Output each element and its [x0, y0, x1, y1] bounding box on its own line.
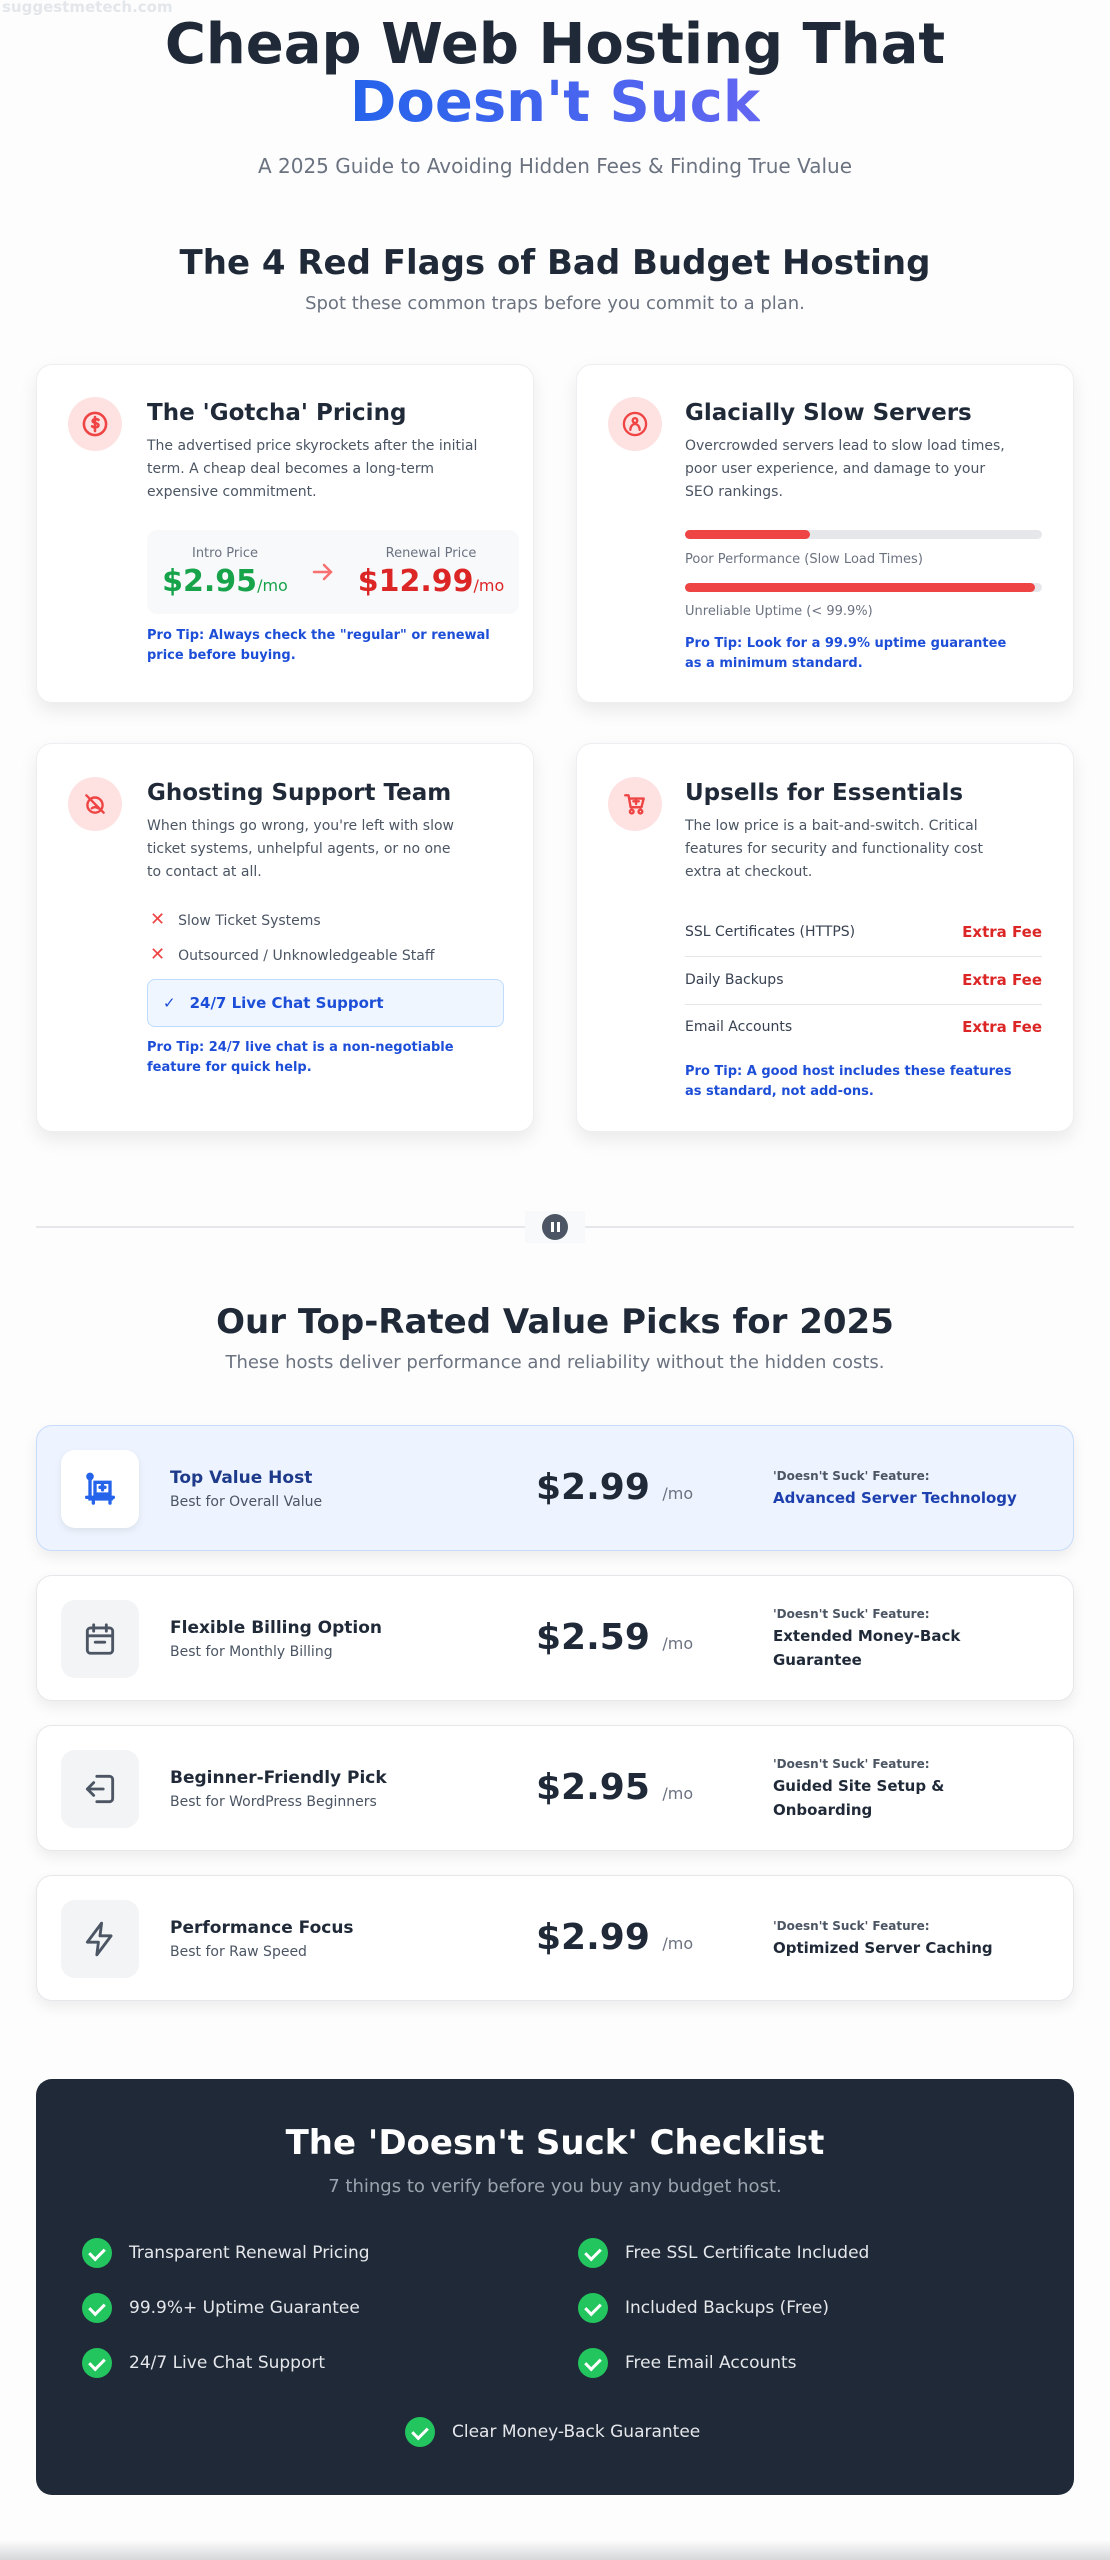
- fee row: ssl: Extra Fee: [962, 923, 1042, 941]
- card text: ticket systems, unhelpful agents, or no one: [147, 841, 451, 857]
- item: Free SSL Certificate Included: [625, 2243, 869, 2263]
- intro price: [162, 546, 288, 599]
- card title: The 'Gotcha' Pricing: [147, 400, 406, 426]
- pick subtitle: Best for WordPress Beginners: [170, 1794, 377, 1810]
- feature: [773, 1919, 993, 1957]
- pro tip: as standard, not add-ons.: [685, 1084, 874, 1099]
- item: [578, 2293, 829, 2323]
- item: [82, 2348, 325, 2378]
- card text: features for security and functionality cost: [685, 841, 983, 857]
- intro price: Intro Price: [192, 546, 258, 561]
- card title: Ghosting Support Team: [147, 780, 451, 806]
- card text: When things go wrong, you're left with slow: [147, 818, 454, 834]
- pick: beginner friendly: [36, 1725, 1074, 1851]
- icon: dollar: [68, 397, 122, 451]
- feature: Guarantee: [773, 1651, 862, 1669]
- card text: Overcrowded servers lead to slow load times,: [685, 438, 1005, 454]
- icon: support off: [68, 777, 122, 831]
- panel: gotcha pricing: [36, 364, 534, 703]
- arrow: [312, 564, 333, 580]
- checklist subtitle: 7 things to verify before you buy any budget host.: [328, 2176, 782, 2197]
- feature: Guided Site Setup &: [773, 1777, 944, 1795]
- panel: ghosting support: [36, 743, 534, 1132]
- feature: 'Doesn't Suck' Feature:: [773, 1919, 930, 1933]
- feature: 'Doesn't Suck' Feature:: [773, 1469, 930, 1483]
- pro tip: as a minimum standard.: [685, 656, 863, 671]
- card title: Upsells for Essentials: [685, 780, 963, 806]
- good item box: [147, 979, 504, 1027]
- good item box: ✓ 24/7 Live Chat Support: [163, 994, 384, 1012]
- card text: SEO rankings.: [685, 484, 783, 500]
- feature: Extended Money-Back: [773, 1627, 960, 1645]
- feature: 'Doesn't Suck' Feature:: [773, 1757, 930, 1771]
- heading: red flags: The 4 Red Flags of Bad Budget Hosting: [180, 243, 930, 283]
- panel: checklist: [36, 2079, 1074, 2495]
- price: $2.99 /mo: [536, 1917, 693, 1958]
- card text: [684, 818, 983, 880]
- item: Clear Money-Back Guarantee: [452, 2422, 700, 2442]
- pick name: Flexible Billing Option: [170, 1618, 382, 1638]
- pro tip: feature for quick help.: [147, 1060, 312, 1075]
- title: Cheap Web Hosting That: [165, 12, 945, 77]
- item: [82, 2238, 370, 2268]
- feature: 'Doesn't Suck' Feature:: [773, 1607, 930, 1621]
- checklist title: The 'Doesn't Suck' Checklist: [286, 2123, 824, 2163]
- item: Transparent Renewal Pricing: [129, 2243, 370, 2263]
- pro tip: price before buying.: [147, 648, 296, 663]
- bar: performance: [685, 530, 1042, 539]
- renewal price: [358, 546, 504, 599]
- card text: [147, 818, 454, 880]
- pick: top value host: [36, 1425, 1074, 1551]
- pro tip: Pro Tip: Look for a 99.9% uptime guarantee: [685, 636, 1006, 651]
- label: performance: Poor Performance (Slow Load Times): [685, 552, 923, 567]
- card text: poor user experience, and damage to your: [685, 461, 985, 477]
- fee row: backups: Daily Backups: [685, 972, 784, 988]
- pro tip: [147, 628, 490, 663]
- pick name: Top Value Host: [170, 1468, 312, 1488]
- panel: slow servers: [576, 364, 1074, 703]
- item: [82, 2293, 360, 2323]
- pro tip: [685, 1064, 1012, 1099]
- item: 99.9%+ Uptime Guarantee: [129, 2298, 360, 2318]
- subheading: red flags: Spot these common traps before you commit to a plan.: [305, 293, 805, 314]
- card text: [685, 438, 1005, 500]
- icon: bolt: [61, 1900, 139, 1978]
- feature: [773, 1757, 944, 1819]
- icon: cart: [608, 777, 662, 831]
- intro price: $2.95/mo: [162, 564, 288, 599]
- divider icon: [525, 1211, 585, 1243]
- item: [578, 2238, 869, 2268]
- fee row: email: [685, 1018, 1042, 1036]
- card text: expensive commitment.: [147, 484, 317, 500]
- subtitle: A 2025 Guide to Avoiding Hidden Fees & Finding True Value: [258, 154, 852, 178]
- card text: [146, 438, 477, 500]
- pick subtitle: Best for Monthly Billing: [170, 1644, 333, 1660]
- title: [165, 12, 945, 135]
- title: Doesn't Suck: [350, 70, 760, 135]
- price comparison: [147, 530, 519, 614]
- pro tip: [147, 1040, 454, 1075]
- feature: [773, 1469, 1017, 1507]
- feature: Optimized Server Caching: [773, 1939, 993, 1957]
- bad item 1: ✕ Slow Ticket Systems: [150, 909, 321, 930]
- pro tip: Pro Tip: 24/7 live chat is a non-negotiable: [147, 1040, 454, 1055]
- item: 24/7 Live Chat Support: [129, 2353, 325, 2373]
- bar: uptime: [685, 583, 1042, 592]
- card text: The advertised price skyrockets after the initial: [147, 438, 477, 454]
- card title: Glacially Slow Servers: [685, 400, 972, 426]
- card text: The low price is a bait-and-switch. Critical: [685, 818, 978, 834]
- icon: server: [61, 1450, 139, 1528]
- feature: Onboarding: [773, 1801, 872, 1819]
- heading: value picks: Our Top-Rated Value Picks for 2025: [216, 1302, 894, 1342]
- feature: Advanced Server Technology: [773, 1489, 1017, 1507]
- fee row: ssl: [685, 923, 1042, 941]
- fee row: ssl: SSL Certificates (HTTPS): [685, 924, 855, 940]
- icon: slow: [608, 397, 662, 451]
- renewal price: Renewal Price: [386, 546, 476, 561]
- bad item 2: ✕ Outsourced / Unknowledgeable Staff: [150, 944, 434, 965]
- pick subtitle: Best for Overall Value: [170, 1494, 322, 1510]
- icon: login: [61, 1750, 139, 1828]
- price: $2.99 /mo: [536, 1467, 693, 1508]
- item: [578, 2348, 797, 2378]
- pick subtitle: Best for Raw Speed: [170, 1944, 307, 1960]
- fee row: backups: Extra Fee: [962, 971, 1042, 989]
- label: uptime: Unreliable Uptime (< 99.9%): [685, 604, 873, 619]
- card text: extra at checkout.: [685, 864, 812, 880]
- icon: calendar: [61, 1600, 139, 1678]
- fee row: backups: [685, 971, 1042, 989]
- price: $2.95 /mo: [536, 1767, 693, 1808]
- pick: performance: [36, 1875, 1074, 2001]
- panel: upsells: [576, 743, 1074, 1132]
- fee row: email: Email Accounts: [685, 1019, 792, 1035]
- pick name: Performance Focus: [170, 1918, 354, 1938]
- pick: flexible billing: [36, 1575, 1074, 1701]
- pro tip: Pro Tip: A good host includes these features: [685, 1064, 1012, 1079]
- item: Free Email Accounts: [625, 2353, 797, 2373]
- pick name: Beginner-Friendly Pick: [170, 1768, 387, 1788]
- fee row: email: Extra Fee: [962, 1018, 1042, 1036]
- pro tip: Pro Tip: Always check the "regular" or renewal: [147, 628, 490, 643]
- feature: [773, 1607, 960, 1669]
- card text: term. A cheap deal becomes a long-term: [147, 461, 434, 477]
- item: [405, 2417, 700, 2447]
- subheading: value picks: These hosts deliver performance and reliability without the hidden costs.: [225, 1352, 885, 1373]
- item: Included Backups (Free): [625, 2298, 829, 2318]
- pro tip: [685, 636, 1006, 671]
- renewal price: $12.99/mo: [358, 564, 504, 599]
- card text: to contact at all.: [147, 864, 262, 880]
- price: $2.59 /mo: [536, 1617, 693, 1658]
